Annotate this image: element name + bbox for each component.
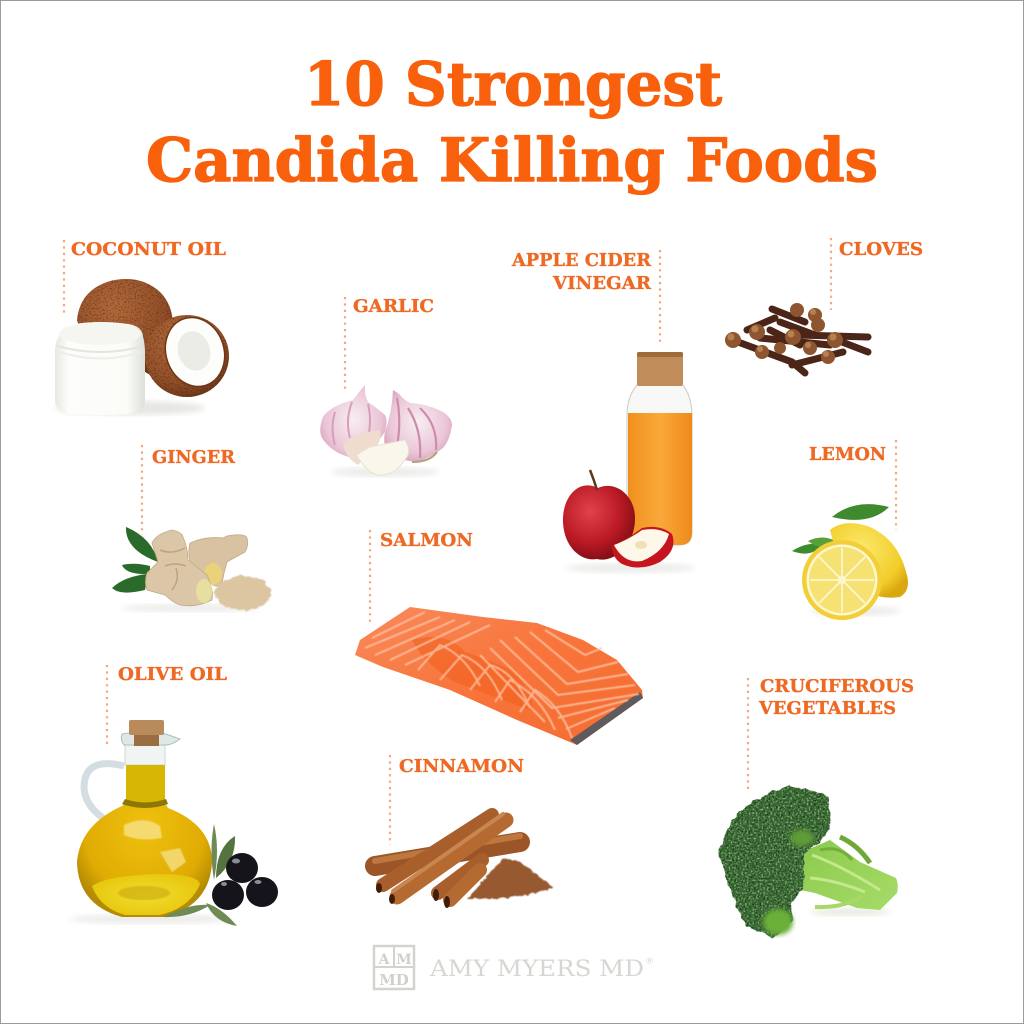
icon: lemon slice xyxy=(802,540,882,620)
icon: left garlic bulb xyxy=(320,385,386,465)
icon: jar of coconut oil xyxy=(55,322,145,415)
food item: garlic xyxy=(320,296,452,477)
logo: Amy Myers MD xyxy=(374,946,654,989)
food item: salmon: SALMON xyxy=(380,530,473,551)
food item: ginger xyxy=(112,445,271,612)
logo mark xyxy=(374,946,414,989)
icon: olive branch xyxy=(163,824,237,926)
icon: cinnamon sticks xyxy=(375,814,520,900)
food item: apple cider vinegar xyxy=(511,250,695,573)
food item: cruciferous vegetables: CRUCIFEROUS xyxy=(760,676,914,697)
icon: broccoli stem xyxy=(800,837,898,910)
icon: leaves xyxy=(792,504,889,554)
food item: olive oil: OLIVE OIL xyxy=(118,664,227,685)
icon: whole lemon xyxy=(830,523,908,598)
icon: cinnamon powder xyxy=(467,859,553,899)
food item: cloves: CLOVES xyxy=(839,239,923,260)
food item: coconut oil xyxy=(55,239,233,415)
food item: garlic: GARLIC xyxy=(353,296,434,317)
logo mark: A xyxy=(378,952,391,968)
logo: Amy Myers MD: ® xyxy=(645,957,654,967)
food item: lemon xyxy=(792,440,908,620)
icon: glass bottle xyxy=(627,352,692,545)
icon: black olives xyxy=(212,853,278,910)
food item: cloves xyxy=(725,238,923,373)
food item: cruciferous vegetables: VEGETABLES xyxy=(758,698,896,719)
food item: olive oil xyxy=(70,664,278,926)
icon: ginger powder xyxy=(215,576,271,610)
food item: lemon: LEMON xyxy=(809,444,886,465)
icon: coconut half xyxy=(145,310,233,397)
icon: glass oil jug xyxy=(77,720,212,917)
icon: broccoli head xyxy=(718,785,830,938)
food item: cinnamon xyxy=(375,755,553,908)
logo mark: MD xyxy=(379,971,409,989)
food item: salmon xyxy=(355,530,643,745)
title: Candida Killing Foods xyxy=(146,126,878,196)
icon: salmon fillet xyxy=(355,607,643,745)
icon: ginger root, front piece xyxy=(146,530,212,606)
food item: coconut oil: COCONUT OIL xyxy=(71,239,226,260)
icon: whole coconut xyxy=(77,279,173,375)
logo mark: M xyxy=(396,952,412,968)
logo wordmark: AMY MYERS MD xyxy=(429,957,644,982)
food item: apple cider vinegar: APPLE CIDER xyxy=(511,250,652,271)
icon: right garlic bulb xyxy=(384,390,452,462)
title: 10 Strongest xyxy=(304,50,722,120)
icon: ginger root, back piece xyxy=(189,535,248,586)
icon: apple slice xyxy=(612,527,674,568)
food item: apple cider vinegar: VINEGAR xyxy=(552,273,652,294)
icon: clove stems xyxy=(738,309,868,373)
icon: leaves xyxy=(112,527,158,593)
icon: apple xyxy=(563,470,635,560)
icon: clove buds xyxy=(725,303,843,364)
icon: oil jug handle xyxy=(84,764,124,818)
icon: garlic clove xyxy=(357,440,409,475)
title xyxy=(146,50,878,196)
food item: cinnamon: CINNAMON xyxy=(399,756,524,777)
food item: ginger: GINGER xyxy=(152,447,236,468)
food item: cruciferous vegetables xyxy=(718,676,914,938)
